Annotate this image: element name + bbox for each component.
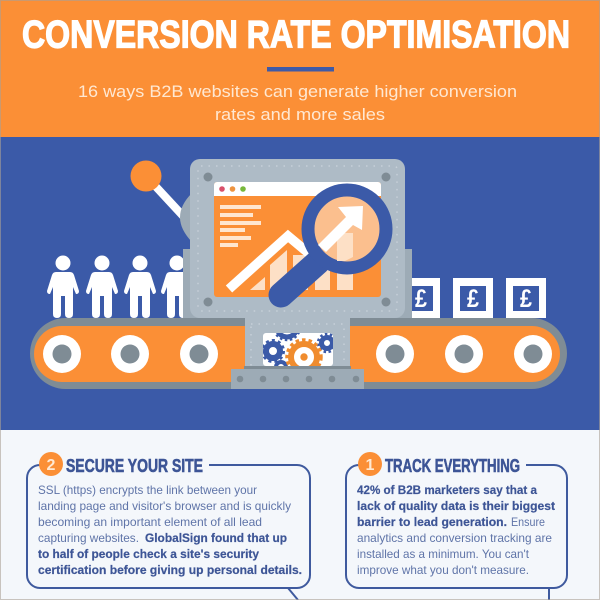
pound boxes: £ <box>467 285 479 313</box>
wheels <box>43 335 552 373</box>
body text: GlobalSign found that up <box>145 531 287 545</box>
hero illustration panel <box>0 137 600 430</box>
machine body <box>183 159 412 318</box>
subtitle <box>78 82 517 124</box>
body text: analytics and conversion tracking are <box>357 531 552 545</box>
body text: landing page and visitor's browser and is quickly <box>38 499 291 513</box>
body text <box>38 483 302 577</box>
body text: to half of people check a site's security <box>38 547 259 561</box>
subtitle: rates and more sales <box>215 105 385 124</box>
step number 1: 1 <box>366 457 375 474</box>
lower content panel <box>26 452 568 600</box>
heading: SECURE YOUR SITE <box>66 456 203 476</box>
card: track everything <box>346 452 567 600</box>
pound boxes <box>405 278 546 318</box>
gear housing <box>231 314 364 389</box>
browser screen <box>214 182 381 297</box>
people queue <box>47 256 193 318</box>
body text: barrier to lead generation. <box>357 515 507 529</box>
conveyor belt <box>30 318 567 389</box>
body text: improve what you don't measure. <box>357 563 529 577</box>
magnified arrow <box>318 206 363 252</box>
magnifying glass <box>281 190 386 295</box>
card: secure your site <box>27 452 310 600</box>
title divider bar <box>267 67 334 72</box>
heading: TRACK EVERYTHING <box>385 456 520 476</box>
step number 2: 2 <box>47 457 56 474</box>
base plate <box>231 369 364 389</box>
step number 2 <box>39 452 63 476</box>
body text: Ensure <box>511 515 545 529</box>
gears <box>263 333 333 366</box>
trend arrow <box>229 236 312 289</box>
body text: installed as a minimum. You can't <box>357 547 530 561</box>
body text: becoming an important element of all lead <box>38 515 262 529</box>
body text <box>357 483 555 577</box>
lever <box>130 160 192 242</box>
pound boxes: £ <box>520 285 532 313</box>
body text: capturing websites. <box>38 531 139 545</box>
body text: 42% of B2B marketers say that a <box>357 483 537 497</box>
subtitle: 16 ways B2B websites can generate higher conversion <box>78 82 517 101</box>
header panel <box>0 0 600 137</box>
body text: SSL (https) encrypts the link between your <box>38 483 257 497</box>
screen text lines <box>220 205 261 247</box>
pound boxes: £ <box>415 285 427 313</box>
bar chart <box>250 250 353 290</box>
step number 1 <box>358 452 382 476</box>
body text: lack of quality data is their biggest <box>357 499 555 513</box>
body text: certification before giving up personal details. <box>38 563 302 577</box>
